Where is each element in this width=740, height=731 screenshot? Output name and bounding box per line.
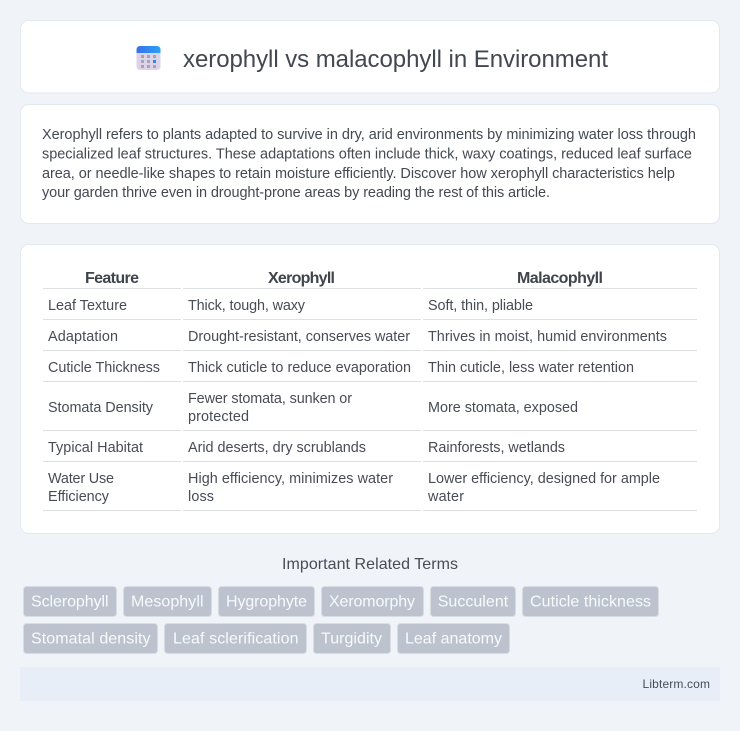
row: typical habitat: Typical Habitat: [48, 440, 143, 456]
title: xerophyll vs malacophyll in Environment: [183, 46, 608, 73]
tag: stomatal density: Stomatal density: [31, 630, 150, 648]
text block: introduction: specialized leaf structures. These adaptations often include thick, waxy coatings, reduced leaf surface: [42, 146, 692, 162]
row: leaf texture: Thick, tough, waxy: [188, 298, 306, 314]
row: water use efficiency: Efficiency: [48, 489, 110, 505]
tag: stomatal density: [24, 624, 158, 654]
tag: turgidity: [314, 624, 390, 654]
row: water use efficiency: Lower efficiency, designed for ample: [428, 471, 660, 487]
panel: comparison table: [20, 244, 720, 534]
table header: Xerophyll: [268, 270, 335, 287]
table header: Malacophyll: [517, 270, 603, 287]
footer credit: Libterm.com: [642, 677, 710, 691]
row: leaf texture: Soft, thin, pliable: [428, 298, 533, 314]
tag: xeromorphy: Xeromorphy: [329, 594, 415, 610]
row: water use efficiency: water: [427, 489, 464, 505]
tag: leaf sclerification: [164, 624, 306, 654]
tag: cuticle thickness: Cuticle thickness: [530, 594, 651, 610]
row: cuticle thickness: Cuticle Thickness: [48, 360, 160, 376]
tag: succulent: [430, 586, 516, 616]
icon: calendar: [136, 46, 160, 70]
table header: Feature: [85, 270, 139, 287]
tag: mesophyll: Mesophyll: [131, 594, 204, 610]
tag: leaf anatomy: Leaf anatomy: [405, 630, 502, 648]
row: cuticle thickness: Thick cuticle to reduce evaporation: [188, 360, 411, 376]
row: typical habitat: Rainforests, wetlands: [428, 440, 565, 456]
tag: leaf sclerification: Leaf sclerification: [173, 630, 298, 648]
row: stomata density: protected: [188, 409, 249, 425]
tag: xeromorphy: [322, 586, 424, 616]
related term tags: [24, 586, 658, 654]
row: typical habitat: [48, 440, 565, 456]
table header: [85, 270, 603, 287]
row: adaptation: Drought-resistant, conserves water: [188, 329, 410, 345]
tag: hygrophyte: [218, 586, 314, 616]
row: water use efficiency: loss: [188, 489, 214, 505]
row: adaptation: Adaptation: [48, 329, 118, 345]
tag: succulent: Succulent: [438, 594, 509, 610]
row: leaf texture: Leaf Texture: [48, 298, 127, 314]
row: stomata density: More stomata, exposed: [428, 400, 578, 416]
tag: cuticle thickness: [522, 586, 658, 616]
row: cuticle thickness: [48, 360, 634, 376]
row: adaptation: Thrives in moist, humid environments: [428, 329, 667, 345]
row: leaf texture: [48, 298, 533, 314]
row: stomata density: Stomata Density: [48, 400, 154, 416]
row: stomata density: Fewer stomata, sunken or: [188, 391, 352, 407]
text block: introduction: your garden thrive even in drought-prone areas by reading the rest of this article.: [42, 185, 550, 201]
row: adaptation: [48, 329, 667, 345]
heading: important related terms: Important Related Terms: [282, 556, 458, 573]
row: typical habitat: Arid deserts, dry scrublands: [188, 440, 366, 456]
panel: introduction: [20, 104, 720, 224]
panel: header: [20, 20, 720, 93]
tag: hygrophyte: Hygrophyte: [226, 594, 307, 610]
row: stomata density: [48, 391, 578, 425]
text block: introduction: Xerophyll refers to plants adapted to survive in dry, arid environments by minimizing water loss through: [42, 127, 696, 143]
row: water use efficiency: High efficiency, minimizes water: [188, 471, 393, 487]
row: water use efficiency: Water Use: [48, 471, 114, 487]
tag: turgidity: Turgidity: [321, 630, 382, 648]
tag: leaf anatomy: [398, 624, 510, 654]
tag: sclerophyll: Sclerophyll: [31, 594, 108, 610]
row: water use efficiency: [48, 471, 660, 505]
text block: introduction: area, or needle-like shapes to retain moisture efficiently. Discover how xerophyll characteristics help: [42, 166, 675, 182]
footer: [20, 667, 720, 701]
text block: introduction: [42, 127, 696, 201]
tag: sclerophyll: [24, 586, 116, 616]
tag: mesophyll: [124, 586, 212, 616]
row: cuticle thickness: Thin cuticle, less water retention: [428, 360, 634, 376]
